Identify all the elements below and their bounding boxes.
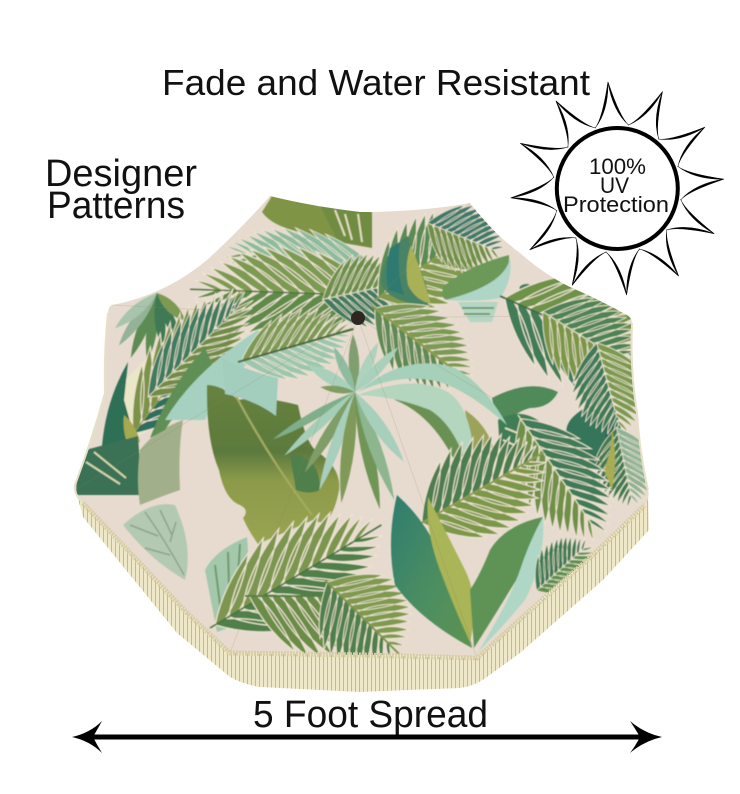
icon: sun badge with 100% UV protection: Protection [563,192,669,217]
frond: centre right frond [371,302,471,388]
heading: designer patterns: Designer [45,153,197,195]
leaf: bottom teal banana leaf [391,495,474,648]
frond: olive frond lower right [420,432,546,538]
frond: right side long frond [499,278,632,386]
leaf: green to mint leaf top right [442,255,511,322]
arrow: spread double headed [72,721,662,753]
leaf: top left olive banana leaf [262,196,372,248]
leaf: central banana leaf [207,358,339,544]
leaf: right dark teal leaf [566,402,622,472]
canopy pale outline [75,313,648,503]
frond: right of cap upper frond [322,254,395,327]
frond: top centre frond [374,214,478,308]
title: fade and water resistant: Fade and Water Resistant [162,62,590,103]
frond: left diagonal frond [123,288,254,436]
heading: designer patterns [45,153,197,227]
frond: pale mint fan lower left [205,537,248,632]
icon: umbrella centre cap [351,311,365,325]
frond: main upper frond [189,244,373,332]
leaf: lower left pale leaf [123,504,188,580]
frond: far right edge frond [572,342,648,506]
frond: upper mint frond [226,226,368,268]
umbrella fringe [75,488,649,692]
icon: sun badge with 100% UV protection: UV [600,173,629,198]
frond: lower right dark frond [492,386,613,540]
label: 5 foot spread: 5 Foot Spread [253,694,488,736]
leaf: left grey green leaf [138,420,183,505]
frond: middle left frond [237,308,354,380]
frond: bottom centre frond [244,574,410,656]
leaf: left dark teal leaf [76,362,142,495]
icon: sun badge with 100% UV protection: 100% [589,154,646,179]
frond: small dark frond near fringe [534,537,592,593]
heading: designer patterns: Patterns [47,185,185,227]
umbrella canopy with tropical leaf print [76,196,648,658]
leaf: bottom green and mint leaf [470,517,543,652]
canopy trim edge [83,503,645,658]
leaf: top teal banana leaf [381,236,431,306]
leaf: mint diagonal blade [150,330,272,438]
frond: left fan palm [115,292,184,358]
frond: bottom left frond [209,510,382,632]
canopy seams [75,196,647,658]
frond: upper right long leaflets [426,205,503,274]
frond: central fan palm [271,334,507,511]
icon: sun badge with 100% UV protection [509,80,725,297]
